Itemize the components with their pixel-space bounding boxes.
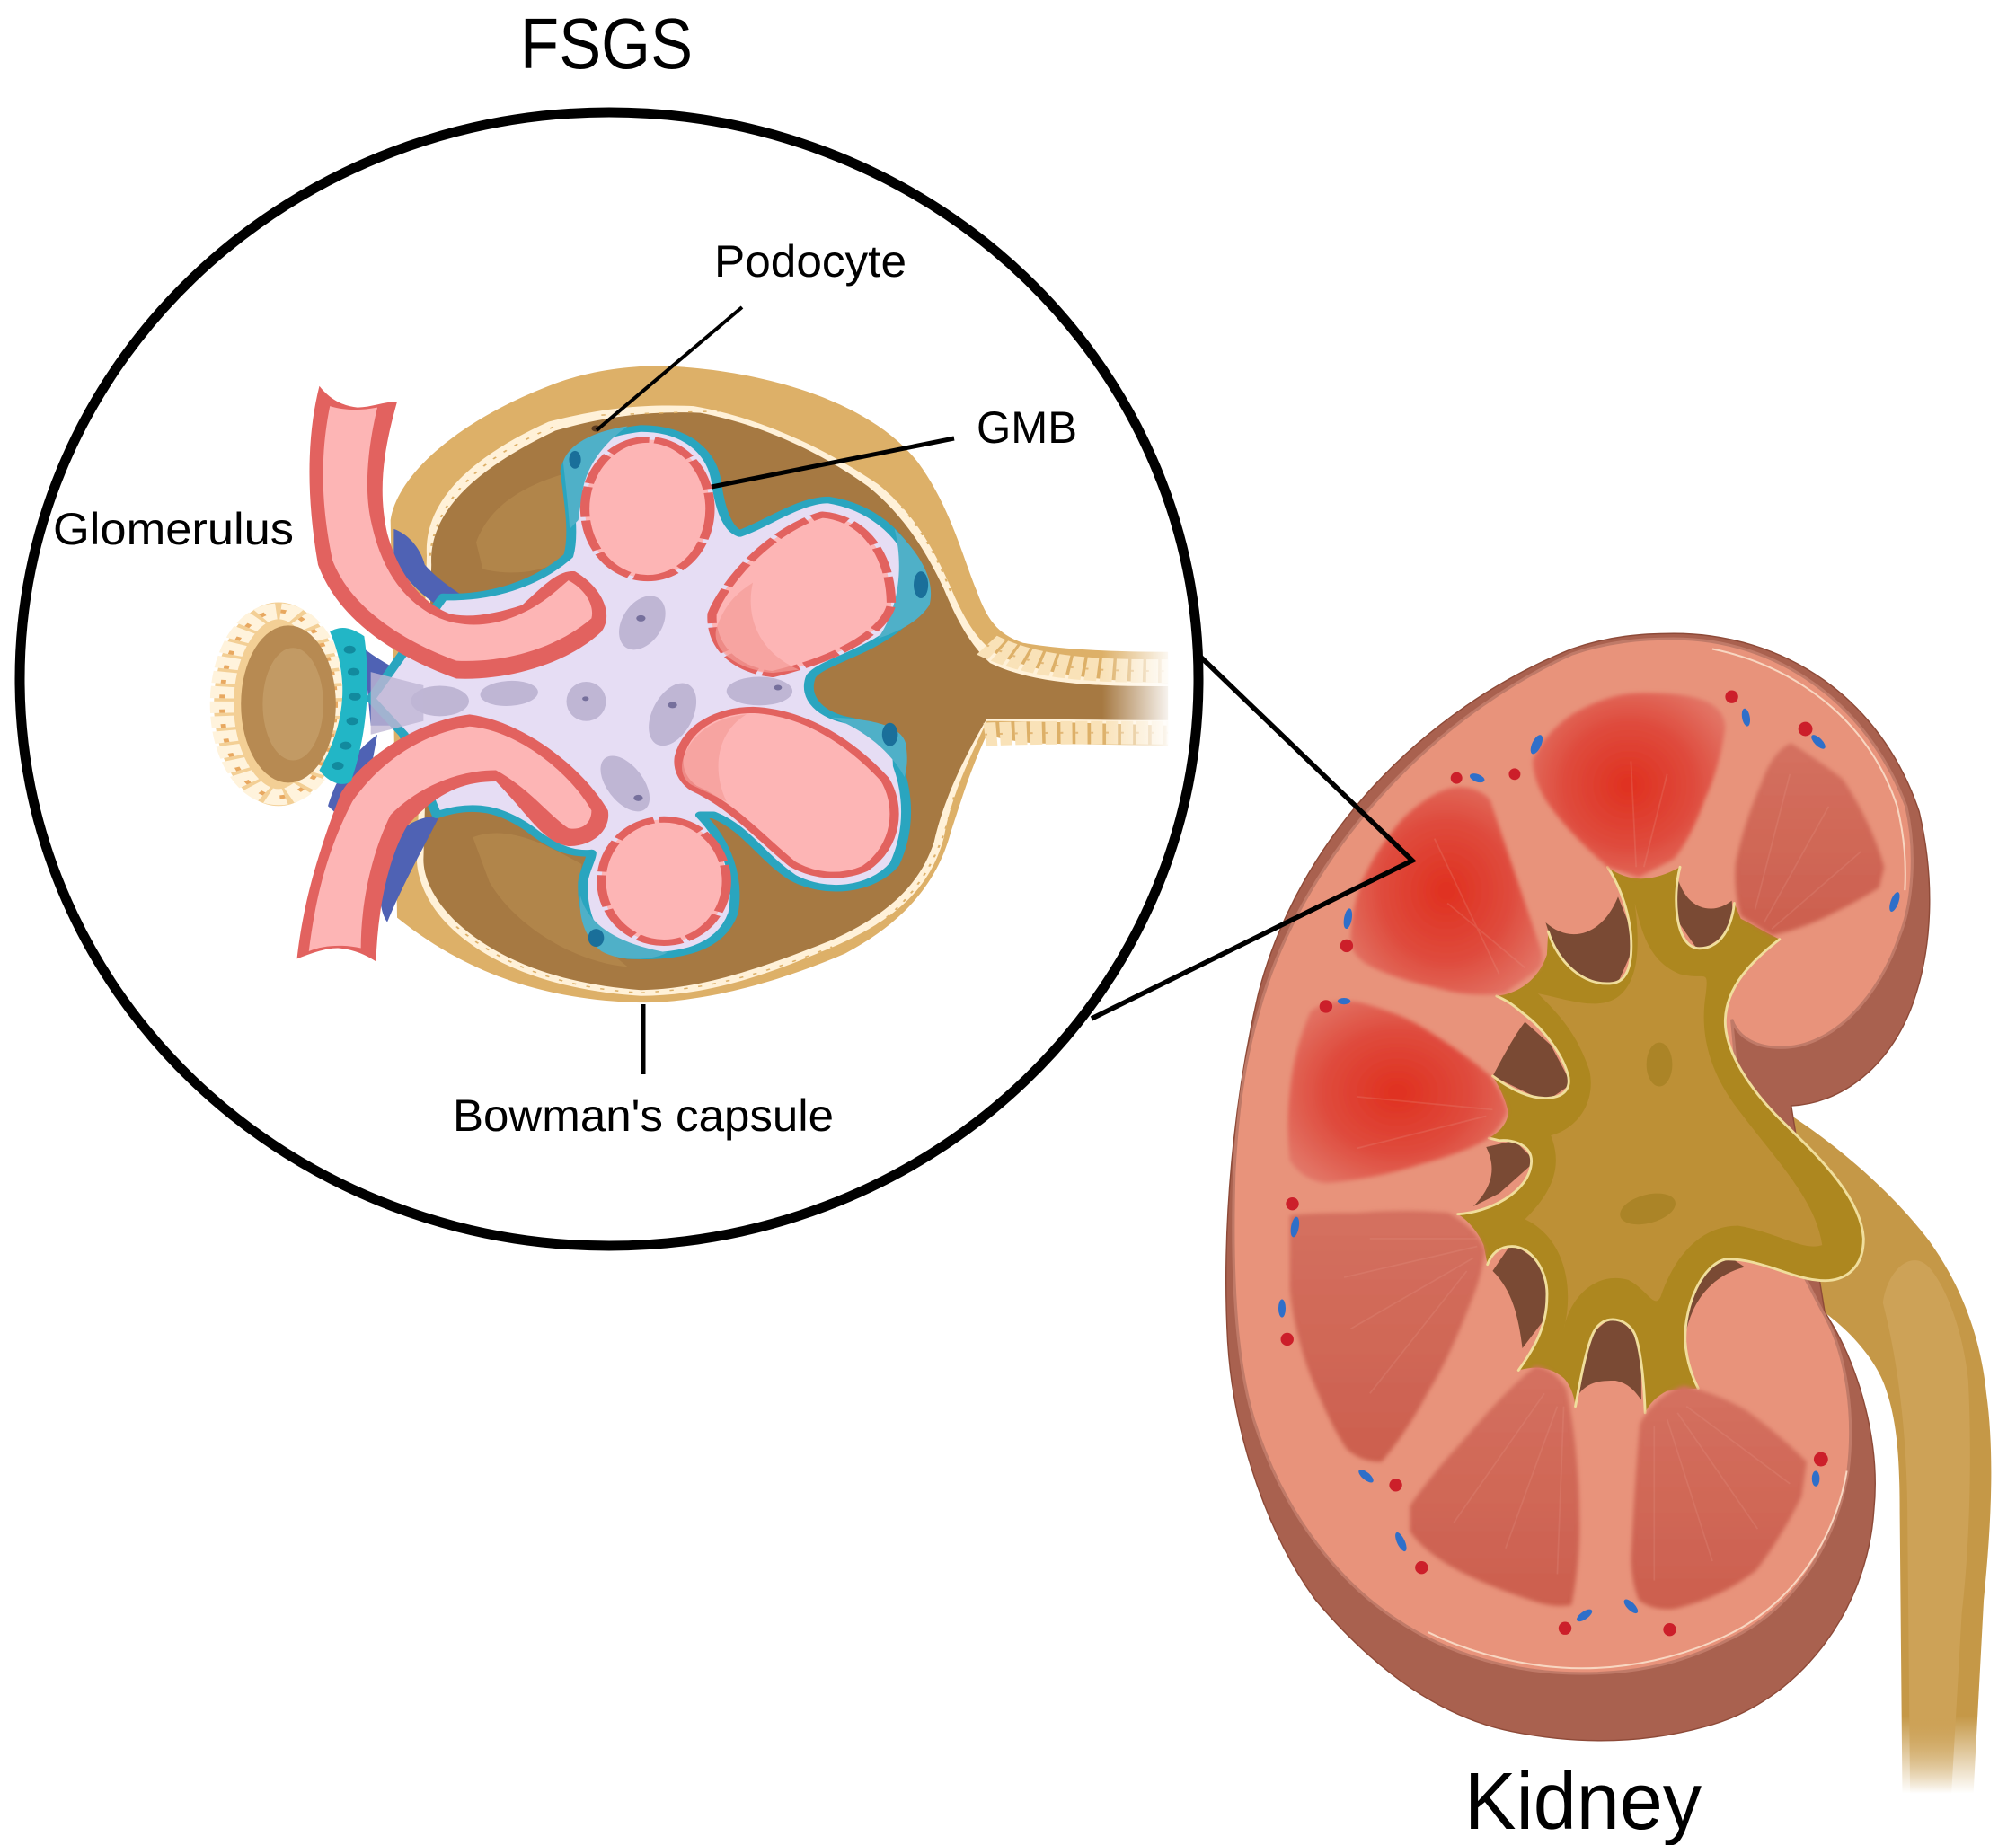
renal pyramids: inflamed (1287, 693, 1725, 1183)
kidney rim highlight (1428, 649, 1905, 1668)
label: GMB: GMB (977, 402, 1077, 453)
filtrate tube epithelium (430, 410, 1168, 993)
blue veins (1278, 708, 1902, 1624)
leader line: podocyte (597, 307, 742, 430)
capillary lower right (679, 710, 895, 875)
vessels: arteries and veins (1278, 690, 1902, 1636)
renal pelvis inner lighter area (1525, 903, 1822, 1329)
renal pelvis recesses (1473, 878, 1745, 1399)
pelvis cream outlines (1458, 867, 1863, 1413)
pyramid left (1287, 1002, 1507, 1183)
label: Podocyte: Podocyte (714, 236, 906, 287)
pyramid upper right (1735, 743, 1884, 935)
bowman space (423, 412, 1168, 990)
pyramid upper left (1350, 787, 1542, 994)
efferent arteriole (297, 714, 608, 961)
afferent arteriole (309, 386, 606, 679)
pyramid bottom left (1410, 1366, 1579, 1606)
renal pyramids: unaffected (1290, 743, 1884, 1610)
pyramid lower left (1290, 1211, 1485, 1461)
capillary loops (585, 439, 895, 943)
glomerulus illustration (214, 366, 1194, 1002)
label: Bowman's capsule: Bowman's capsule (453, 1090, 834, 1141)
pelvis calyx marks (1616, 1043, 1679, 1230)
label: Glomerulus: Glomerulus (53, 504, 294, 554)
bowman capsule cream lining (417, 406, 1168, 996)
renal pelvis (1458, 867, 1863, 1413)
label: Kidney: Kidney (1464, 1757, 1702, 1845)
capillary bottom (601, 819, 727, 943)
kidney cortex face (1233, 639, 1912, 1673)
red arteries (1281, 690, 1828, 1636)
kidney (1226, 633, 1991, 1794)
capillary shading (682, 583, 799, 801)
bowman capsule outer wall (391, 366, 1168, 1002)
distal tubule macula densa (214, 602, 343, 806)
capillary top (585, 439, 710, 578)
mesangial cells (371, 592, 792, 816)
capillary upper right (712, 515, 891, 675)
pyramid bottom right (1631, 1386, 1807, 1610)
pyramid top (1533, 693, 1725, 878)
magnified circle outline (20, 112, 1198, 1246)
pyramid striations (1344, 761, 1861, 1581)
leader line: Bowman's capsule (641, 1004, 645, 1074)
podocyte teal thickenings (563, 427, 931, 959)
tube fade overlay (1102, 640, 1194, 757)
tuft teal membrane and lavender mesangium (371, 428, 920, 956)
title: FSGS: FSGS (520, 4, 693, 84)
podocyte pointer line end (591, 426, 601, 431)
leader line: GMB (712, 438, 954, 487)
macula densa teal cells (319, 628, 367, 784)
bowman space lighter shading (473, 471, 628, 967)
kidney back shell (1226, 633, 1930, 1741)
mesangial blue patches (328, 529, 463, 922)
zoom connector lines (1092, 655, 1412, 1019)
ureter (1775, 1106, 1991, 1794)
